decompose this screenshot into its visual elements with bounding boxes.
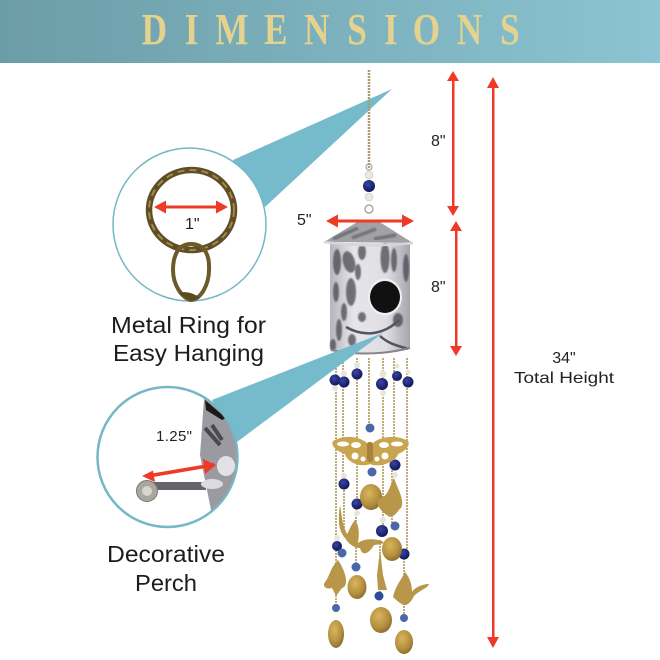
label: total height: Total Height	[514, 370, 615, 387]
label: 5 inch: 5"	[297, 212, 312, 229]
text: metal ring caption	[111, 312, 266, 366]
gold bells	[328, 484, 413, 654]
arrow: upper 8 inch	[447, 71, 459, 216]
label: upper 8 inch: 8"	[431, 133, 446, 150]
icon: large ring	[149, 170, 234, 250]
icon: small ring	[173, 244, 209, 301]
blue beads	[330, 368, 414, 560]
bottom rim	[331, 348, 410, 354]
label: total height	[514, 350, 615, 387]
callout circle: decorative perch	[98, 387, 238, 527]
entrance hole	[368, 278, 402, 316]
label: 1 inch: 1"	[185, 216, 200, 233]
arrow: lower 8 inch	[450, 221, 462, 356]
top beads	[363, 164, 375, 213]
hanging chain	[368, 70, 370, 168]
text: metal ring caption: Metal Ring for	[111, 312, 266, 338]
wind chime	[324, 70, 429, 654]
gold butterflies	[324, 478, 429, 605]
title: DIMENSIONS	[142, 4, 520, 54]
text: perch caption: Perch	[135, 570, 197, 596]
text: metal ring caption: Easy Hanging	[113, 340, 264, 366]
label: lower 8 inch: 8"	[431, 279, 446, 296]
birdhouse	[324, 221, 413, 354]
arrow: total height	[487, 77, 499, 648]
gold butterfly ornament	[332, 437, 409, 465]
photo: perch close-up	[136, 399, 238, 515]
label: total height: 34"	[552, 350, 576, 367]
arrow: 5 inch width	[326, 214, 414, 228]
hanging chains	[336, 356, 407, 620]
callout wedge: perch	[212, 333, 383, 442]
header banner	[0, 0, 660, 63]
label: 1.25 inch: 1.25"	[156, 428, 192, 445]
callout wedge: ring	[233, 89, 392, 207]
text: perch caption	[107, 541, 225, 596]
callout circle: metal ring	[113, 148, 266, 301]
arrow: perch length	[142, 459, 216, 482]
roof	[324, 221, 413, 243]
text: perch caption: Decorative	[107, 541, 225, 567]
arrow: ring width	[154, 200, 228, 214]
white beads	[332, 362, 410, 541]
speckled blue beads	[332, 424, 408, 622]
